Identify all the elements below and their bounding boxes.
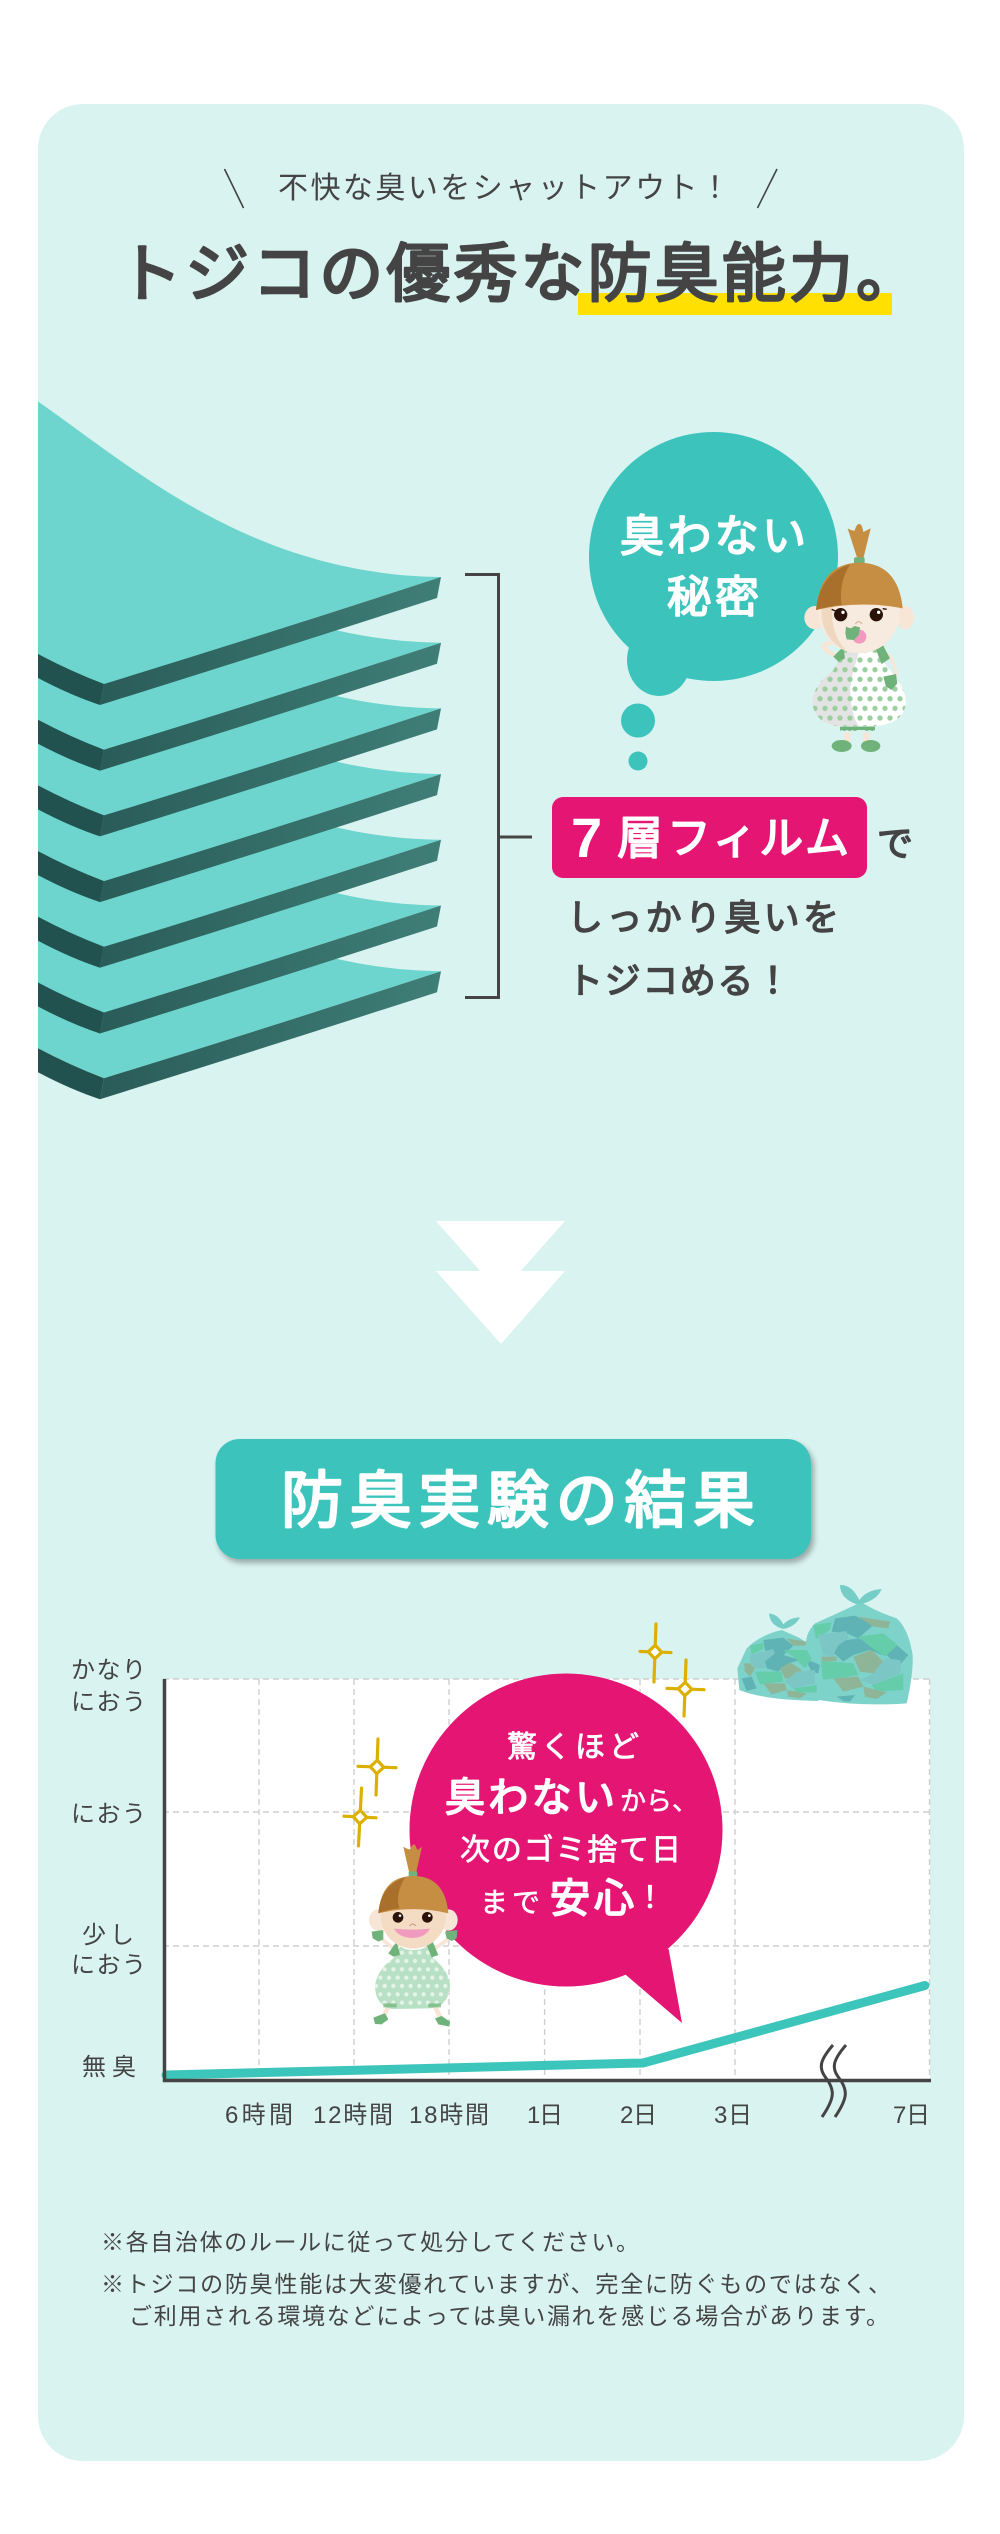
x axis labels: 12時間 xyxy=(313,2102,393,2129)
thought bubble: 臭わない秘密: 秘密 xyxy=(667,573,759,622)
thought bubble: 臭わない秘密: 臭わない xyxy=(620,512,806,561)
x axis labels: 7日 xyxy=(893,2102,930,2129)
heading button: 防臭実験の結果 xyxy=(216,1439,814,1563)
callout: 7層フィルム badge and copy: 層 xyxy=(617,812,663,864)
sparkles xyxy=(343,1623,705,1847)
callout: pink speech bubble xyxy=(410,1674,722,2023)
callout: pink speech bubble: 臭わない xyxy=(445,1776,615,1820)
small bag xyxy=(737,1613,823,1701)
x axis labels: 3日 xyxy=(714,2102,752,2129)
axes xyxy=(164,1679,931,2080)
callout: pink speech bubble: 次のゴミ捨て日 xyxy=(460,1834,681,1867)
highlight: yellow marker under title xyxy=(578,293,892,315)
callout: 7層フィルム badge and copy: で xyxy=(877,823,913,864)
y axis labels xyxy=(71,1657,146,2081)
large bag xyxy=(806,1585,913,1704)
axis break xyxy=(821,2045,846,2117)
callout: 7層フィルム badge and copy: 7 xyxy=(571,806,602,869)
callout: 7層フィルム badge and copy: フィルム xyxy=(667,814,849,863)
callout: pink speech bubble: から、 xyxy=(620,1786,698,1816)
callout: pink speech bubble: ！ xyxy=(635,1882,665,1915)
y axis labels: 無臭 xyxy=(82,2054,136,2081)
y axis labels: におう xyxy=(71,1689,146,1716)
notes: footnotes: ご利用される環境などによっては臭い漏れを感じる場合があります。 xyxy=(129,2303,889,2329)
callout: pink speech bubble: 安心 xyxy=(550,1877,634,1921)
bracket xyxy=(465,574,532,998)
x axis labels xyxy=(225,2102,930,2129)
chart: odor level over time xyxy=(71,1657,931,2129)
x axis labels: 6時間 xyxy=(225,2102,293,2129)
icon: trash bags xyxy=(737,1585,913,1704)
notes: footnotes: ※トジコの防臭性能は大変優れていますが、完全に防ぐものではなく、 xyxy=(101,2271,891,2297)
callout: pink speech bubble: まで xyxy=(480,1887,540,1918)
character: cheering girl xyxy=(369,1844,458,2027)
data line xyxy=(166,1986,925,2075)
callout: 7層フィルム badge and copy: トジコめる！ xyxy=(567,960,791,1001)
title: トジコの優秀な防臭能力。 xyxy=(118,238,920,310)
callout: 7層フィルム badge and copy: しっかり臭いを xyxy=(567,897,839,938)
callout: 7層フィルム badge and copy xyxy=(552,797,913,1001)
x axis labels: 2日 xyxy=(620,2102,657,2129)
y axis labels: 少し xyxy=(82,1922,134,1949)
notes: footnotes xyxy=(101,2229,891,2329)
thought bubble: 臭わない秘密 xyxy=(589,432,838,770)
notes: footnotes: ※各自治体のルールに従って処分してください。 xyxy=(101,2229,639,2255)
heading: subtitle with slashes: 不快な臭いをシャットアウト！ xyxy=(278,172,730,205)
heading: subtitle with slashes xyxy=(224,169,777,208)
y axis labels: かなり xyxy=(71,1657,146,1684)
arrow: double down chevron xyxy=(436,1221,565,1344)
y axis labels: におう xyxy=(71,1952,146,1979)
character: girl covering her mouth xyxy=(804,524,914,752)
callout: pink speech bubble: 驚くほど xyxy=(507,1731,639,1764)
diagram: seven film layers xyxy=(38,402,441,1099)
heading button: 防臭実験の結果: 防臭実験の結果 xyxy=(281,1467,755,1536)
x axis labels: 1日 xyxy=(527,2102,563,2129)
x axis labels: 18時間 xyxy=(409,2102,489,2129)
y axis labels: におう xyxy=(71,1801,146,1828)
